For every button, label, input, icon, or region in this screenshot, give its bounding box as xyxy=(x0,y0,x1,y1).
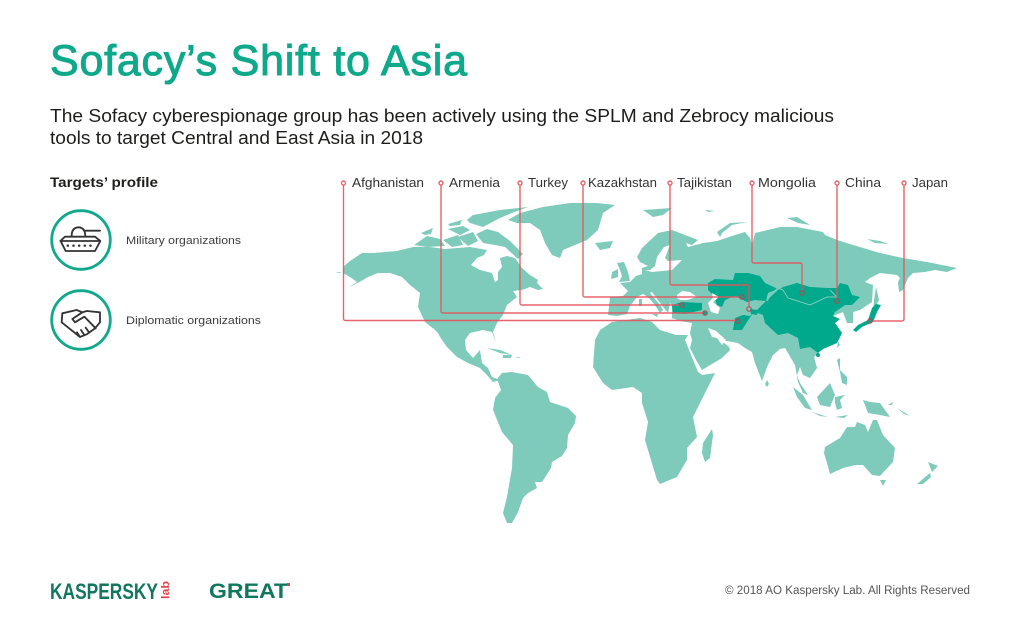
heading: targets' profile: Targets’ profile xyxy=(50,174,158,190)
logo: GREAT: GREAT xyxy=(209,580,288,603)
subtitle text block xyxy=(50,105,834,148)
line: Tajikistan xyxy=(670,185,749,307)
country labels: Kazakhstan xyxy=(588,175,657,190)
line: Japan xyxy=(872,185,904,321)
subtitle text block: The Sofacy cyberespionage group has been actively using the SPLM and Zebrocy malicious xyxy=(50,105,834,126)
panel: targets' profile xyxy=(50,174,262,349)
country labels: Japan xyxy=(912,175,948,190)
markers: country end points xyxy=(680,291,872,323)
logo: Kaspersky Lab: KASPERSKY xyxy=(50,579,158,604)
line: Afghanistan xyxy=(344,185,736,320)
line: Kazakhstan xyxy=(583,185,740,297)
map: pale borders xyxy=(767,288,837,305)
label: diplomatic organizations: Diplomatic organizations xyxy=(126,315,262,327)
country labels: Mongolia xyxy=(758,175,817,190)
leader lines and markers xyxy=(342,181,906,323)
line: Mongolia xyxy=(752,185,802,291)
copyright: © 2018 AO Kaspersky Lab. All Rights Reserved xyxy=(725,585,970,597)
icon: tank in circle xyxy=(52,211,110,269)
country labels xyxy=(352,175,948,190)
world map xyxy=(335,203,957,523)
line: Armenia xyxy=(441,185,703,313)
icon: handshake in circle xyxy=(52,291,110,349)
label: military organizations: Military organizations xyxy=(126,235,242,247)
country labels: Armenia xyxy=(449,175,501,190)
country labels: Turkey xyxy=(528,175,569,190)
map: land masses xyxy=(335,203,957,523)
title: Sofacy’s Shift to Asia xyxy=(50,37,467,85)
logo: Kaspersky Lab: lab xyxy=(160,581,172,599)
country labels: Tajikistan xyxy=(677,175,732,190)
line: Turkey xyxy=(520,185,680,305)
map: inland seas xyxy=(433,245,726,347)
country labels: China xyxy=(845,175,882,190)
markers: label end points xyxy=(342,181,906,185)
line: China xyxy=(836,185,838,299)
subtitle text block: tools to target Central and East Asia in 2018 xyxy=(50,127,423,148)
country labels: Afghanistan xyxy=(352,175,424,190)
map: highlighted target countries xyxy=(672,273,881,357)
